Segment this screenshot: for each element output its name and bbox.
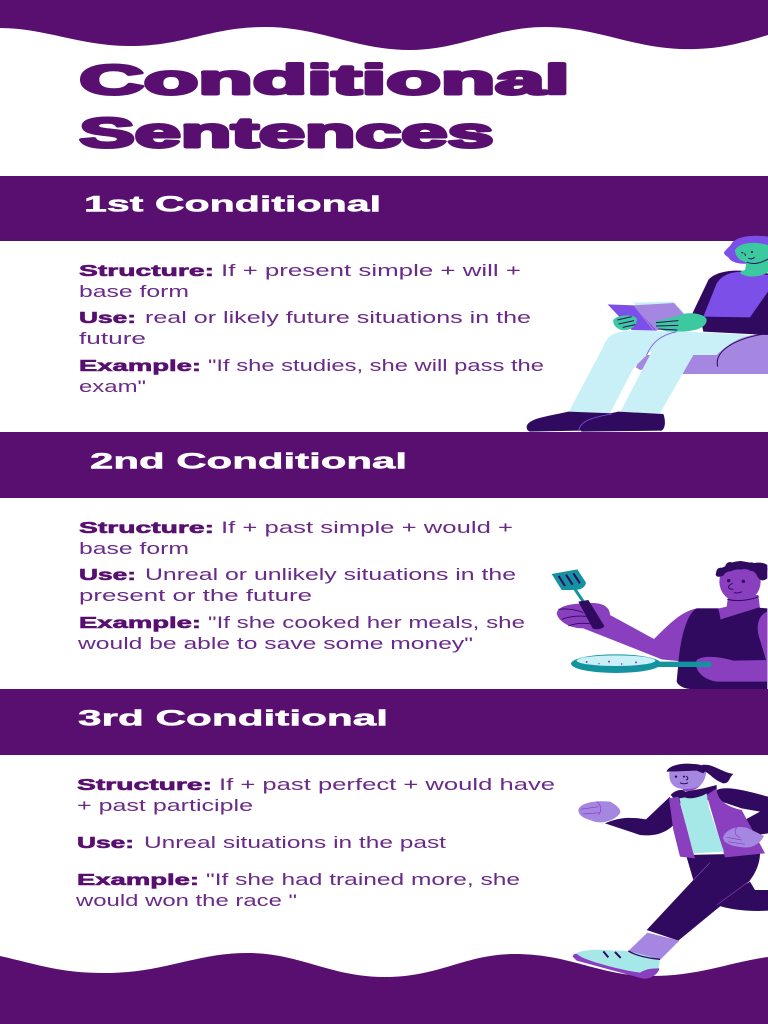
panel: 2nd conditional text: Unreal or unlikely situations in the: [145, 566, 516, 584]
top wave banner: [0, 0, 768, 50]
panel: 2nd conditional text: "If she cooked her meals, she: [208, 614, 525, 632]
panel: 2nd conditional header: 2nd Conditional: [90, 448, 407, 474]
panel: 2nd conditional text: Structure:: [79, 520, 214, 537]
panel: 1st conditional text: "If she studies, she will pass the: [208, 357, 544, 375]
title: [80, 56, 570, 156]
panel: 2nd conditional text: base form: [79, 540, 189, 558]
panel: 2nd conditional text: present or the future: [79, 587, 312, 605]
panel: 1st conditional text: If + present simple + will +: [221, 262, 521, 280]
panel: 1st conditional text: real or likely future situations in the: [145, 309, 531, 327]
bottom wave banner: [0, 953, 768, 1024]
panel: 2nd conditional text: [77, 519, 525, 653]
panel: 3rd conditional text: Example:: [77, 872, 199, 889]
panel: 3rd conditional text: "If she had trained more, she: [206, 871, 520, 889]
panel: 3rd conditional text: Unreal situations in the past: [144, 834, 447, 852]
panel: 3rd conditional text: Use:: [77, 835, 134, 852]
title: Conditional: [80, 56, 570, 103]
icon: woman running: [573, 764, 768, 979]
panel: 1st conditional header: 1st Conditional: [84, 192, 381, 216]
panel: 2nd conditional text: Example:: [79, 615, 201, 632]
panel: 1st conditional text: future: [79, 330, 146, 348]
panel: 3rd conditional text: [75, 776, 555, 910]
icon: man cooking with pan and spatula: [552, 561, 767, 689]
panel: 2nd conditional text: would be able to save some money": [77, 635, 473, 653]
panel: 3rd conditional text: + past participle: [77, 797, 253, 815]
panel: 1st conditional text: Example:: [79, 358, 201, 375]
panel: 2nd conditional header: [0, 432, 768, 498]
panel: 2nd conditional text: Use:: [79, 567, 136, 584]
panel: 3rd conditional text: Structure:: [77, 777, 212, 794]
panel: 3rd conditional header: [0, 689, 768, 755]
panel: 1st conditional text: Use:: [79, 310, 136, 327]
panel: 3rd conditional header: 3rd Conditional: [78, 706, 388, 730]
title: Sentences: [80, 109, 494, 156]
panel: 1st conditional text: Structure:: [79, 263, 214, 280]
panel: 3rd conditional text: If + past perfect + would have: [219, 776, 555, 794]
icon: woman reading a book on a chair: [527, 236, 768, 432]
panel: 2nd conditional text: If + past simple + would +: [221, 519, 513, 537]
panel: 1st conditional text: exam": [79, 378, 146, 396]
panel: 3rd conditional text: would won the race ": [75, 892, 297, 910]
panel: 1st conditional header: [0, 176, 768, 241]
panel: 1st conditional text: [79, 262, 544, 396]
panel: 1st conditional text: base form: [79, 283, 189, 301]
